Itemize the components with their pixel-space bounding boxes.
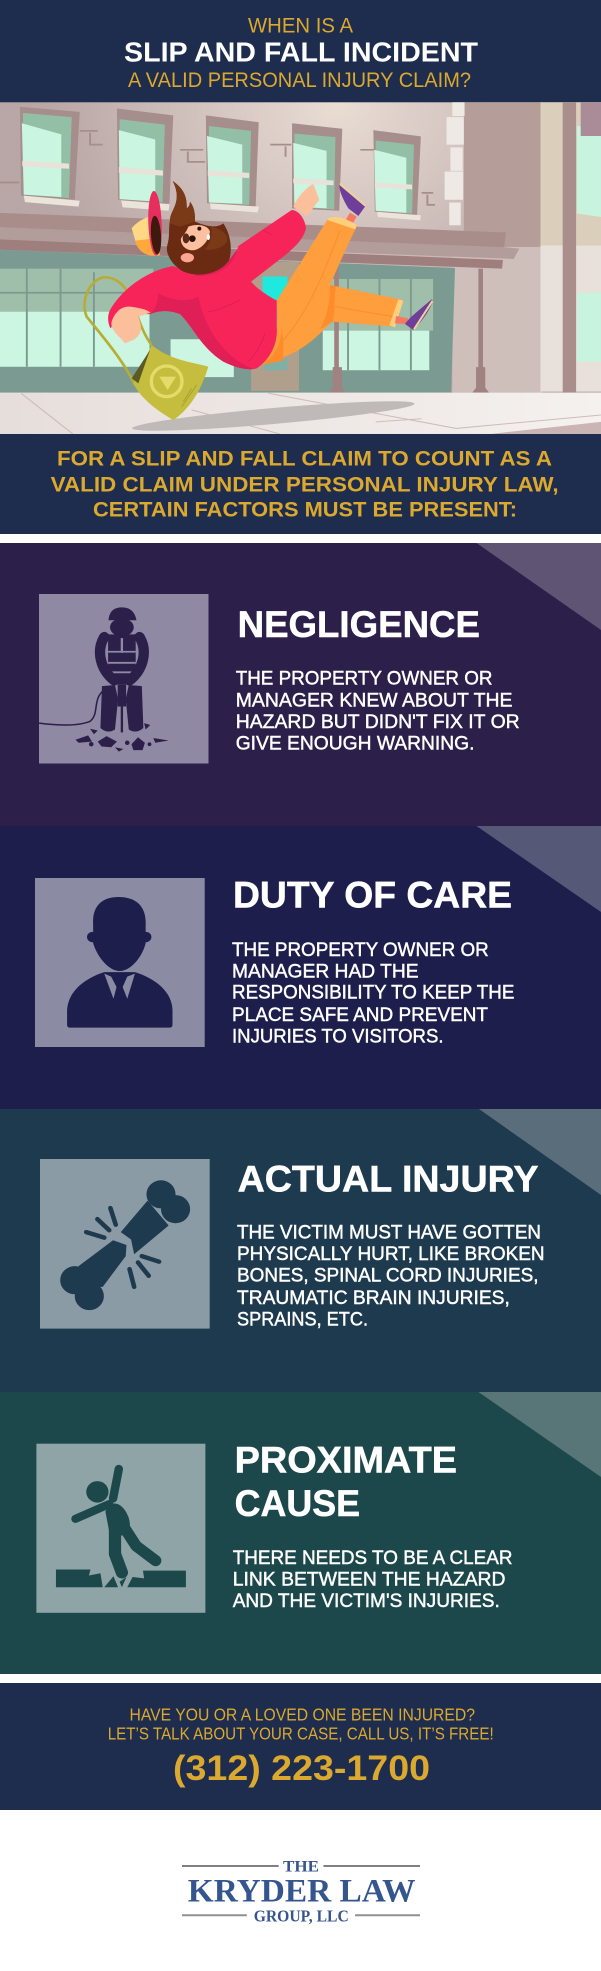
handbag [132, 345, 208, 420]
panel: actual injury [0, 1109, 601, 1392]
intro text: CERTAIN FACTORS MUST BE PRESENT: [93, 498, 517, 522]
call to action text [108, 1705, 494, 1743]
icon: person in suit [67, 897, 172, 1028]
description: INJURIES TO VISITORS. [232, 1026, 444, 1048]
title line 2: SLIP AND FALL INCIDENT [124, 36, 478, 67]
awning [0, 213, 519, 269]
heading: CAUSE [235, 1483, 360, 1524]
panel: proximate cause [0, 1392, 601, 1674]
intro text: VALID CLAIM UNDER PERSONAL INJURY LAW, [51, 474, 559, 497]
description: BONES, SPINAL CORD INJURIES, [237, 1265, 538, 1287]
upper windows [20, 107, 421, 220]
description [233, 1547, 512, 1612]
logo: The Kryder Law Group, LLC: GROUP, LLC [254, 1907, 349, 1926]
description: THERE NEEDS TO BE A CLEAR [233, 1547, 512, 1569]
illustration: falling woman [85, 181, 433, 436]
logo: The Kryder Law Group, LLC: THE [283, 1858, 319, 1875]
icon: person falling through a hole [56, 1469, 186, 1587]
description: PHYSICALLY HURT, LIKE BROKEN [237, 1243, 545, 1265]
call to action text: HAVE YOU OR A LOVED ONE BEEN INJURED? [130, 1705, 475, 1725]
description: HAZARD BUT DIDN'T FIX IT OR [236, 711, 520, 733]
description: MANAGER KNEW ABOUT THE [236, 690, 512, 712]
phone number: (312) 223-1700 [173, 1749, 430, 1788]
logo: The Kryder Law Group, LLC [182, 1858, 420, 1926]
description: GIVE ENOUGH WARNING. [236, 733, 474, 755]
description: THE VICTIM MUST HAVE GOTTEN [237, 1222, 541, 1244]
hat [132, 191, 163, 256]
description [232, 939, 514, 1048]
intro band [0, 434, 601, 534]
intro text: FOR A SLIP AND FALL CLAIM TO COUNT AS A [57, 448, 552, 471]
description: PLACE SAFE AND PREVENT [232, 1004, 488, 1026]
call to action band [0, 1683, 601, 1810]
wall brick marks [0, 131, 435, 205]
heading: DUTY OF CARE [233, 874, 512, 915]
heading: NEGLIGENCE [238, 604, 480, 645]
description: TRAUMATIC BRAIN INJURIES, [237, 1287, 510, 1309]
icon: broken bone [60, 1180, 190, 1310]
description: LINK BETWEEN THE HAZARD [233, 1569, 505, 1591]
description: THE PROPERTY OWNER OR [236, 668, 492, 690]
call to action text: LET’S TALK ABOUT YOUR CASE, CALL US, IT’S FREE! [108, 1723, 494, 1743]
illustration: city street background [0, 102, 601, 434]
ground shadow [132, 396, 415, 436]
panel: negligence [0, 543, 601, 826]
handbag strap [85, 277, 152, 385]
heading: ACTUAL INJURY [238, 1158, 539, 1199]
right buildings [452, 102, 601, 410]
title line 3: A VALID PERSONAL INJURY CLAIM? [128, 68, 471, 92]
panel: duty of care [0, 826, 601, 1109]
description [236, 668, 520, 755]
heading: PROXIMATE [235, 1440, 457, 1481]
icon: worker with jackhammer [39, 607, 169, 752]
description [237, 1222, 545, 1330]
trousers and shoes [260, 183, 433, 365]
title line 1: WHEN IS A [248, 14, 354, 38]
stone corner blocks [445, 102, 465, 225]
jacket [108, 210, 306, 369]
logo: The Kryder Law Group, LLC: KRYDER LAW [188, 1874, 416, 1910]
hair and face [167, 181, 231, 275]
storefront [0, 250, 489, 393]
intro text [51, 448, 559, 522]
description: AND THE VICTIM'S INJURIES. [233, 1590, 500, 1612]
description: MANAGER HAD THE [232, 961, 419, 983]
heading [235, 1440, 457, 1524]
pavement [0, 393, 601, 434]
description: THE PROPERTY OWNER OR [232, 939, 489, 961]
hands [111, 184, 319, 343]
header band [0, 0, 601, 103]
description: SPRAINS, ETC. [237, 1308, 368, 1330]
description: RESPONSIBILITY TO KEEP THE [232, 982, 514, 1004]
